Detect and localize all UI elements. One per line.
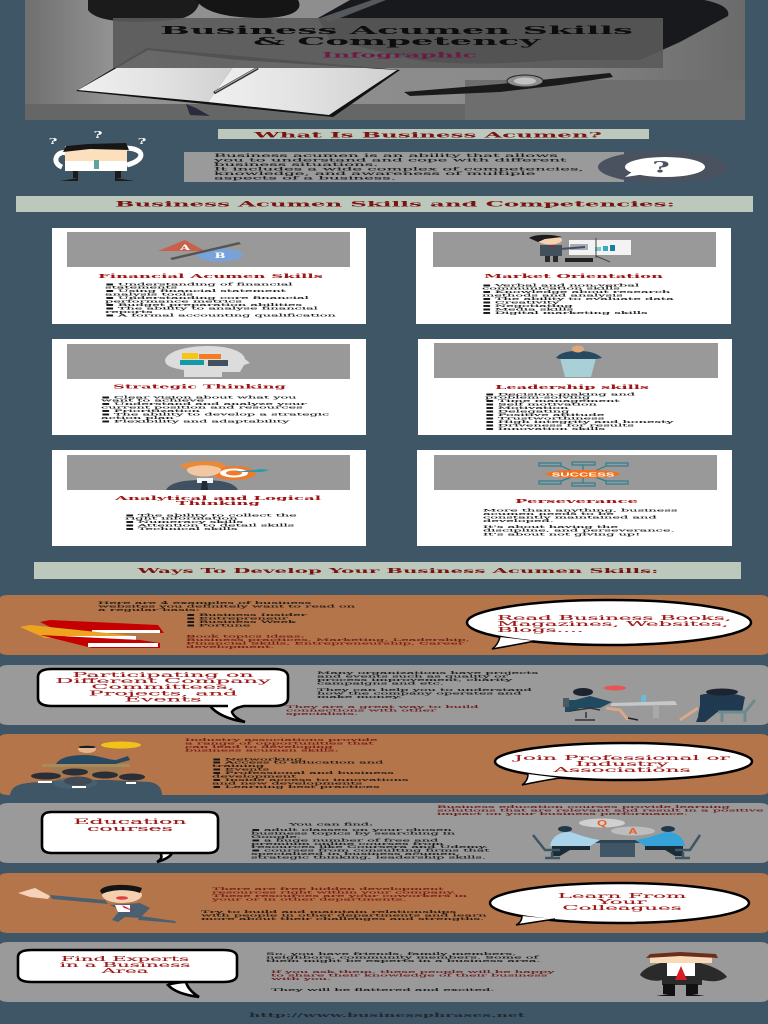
benefits list: ▪ Access to education and bbox=[212, 760, 383, 765]
definition text: It includes a wide complex of competencies, bbox=[214, 166, 584, 172]
skills list: ▪ Understanding core financial bbox=[105, 296, 309, 300]
benefits list: ▪ Events bbox=[212, 767, 269, 772]
course list: strategic thinking, leadership skills. bbox=[251, 855, 486, 860]
definition text: knowledge, and awareness of multiple bbox=[214, 171, 535, 176]
perseverance text: More than anything, business bbox=[483, 508, 678, 513]
skills list: ▪ Time management bbox=[485, 399, 620, 403]
course list: ▪ adult classes on your chosen bbox=[251, 828, 452, 832]
icon: questions and answers: A bbox=[628, 827, 638, 836]
card title: Thinking bbox=[176, 500, 260, 506]
skills list: action plan bbox=[101, 416, 174, 420]
benefits list: development bbox=[212, 774, 296, 779]
icon: success diagram bbox=[539, 462, 628, 486]
icon: questions and answers: Q bbox=[597, 819, 607, 828]
text: friends: So, you have friends, family members, bbox=[266, 952, 516, 956]
course list: premium online courses from bbox=[251, 842, 444, 846]
speech bubble: Industry bbox=[575, 760, 670, 768]
speech bubble: Projects, and bbox=[89, 689, 238, 697]
heading: skills and competencies bbox=[16, 196, 753, 212]
speech bubble: Events bbox=[124, 695, 202, 703]
course list: resources like Coursera and Udemy. bbox=[251, 845, 488, 849]
text: connections: They are a great way to build bbox=[286, 705, 478, 709]
panel: definition bbox=[184, 151, 728, 183]
intro text: Here are 4 examples of business bbox=[98, 601, 311, 605]
icon: presenter with chart bbox=[529, 235, 631, 262]
heading: ways to develop bbox=[34, 562, 741, 579]
skills list: ▪ Decision-making and bbox=[485, 392, 635, 397]
text: connections: specialists. bbox=[286, 712, 358, 716]
question marks: ? bbox=[49, 137, 57, 146]
panel: read business books bbox=[0, 595, 768, 655]
icon: leader at podium bbox=[556, 346, 602, 377]
benefits list: ▪ Learning best practices bbox=[212, 785, 380, 789]
speech bubble: Join Professional or bbox=[511, 754, 730, 762]
card title: Leadership skills bbox=[495, 384, 649, 390]
speech bubble: Education bbox=[73, 818, 187, 826]
title: & Competency bbox=[253, 35, 542, 48]
panel: strategic thinking bbox=[52, 339, 366, 435]
speech bubble: Learn From bbox=[558, 892, 686, 900]
text: relationships: more about their challenges and strengths. bbox=[201, 917, 484, 921]
speech bubble: Participating on bbox=[72, 671, 254, 679]
skills list: ▪ The ability to collect the bbox=[125, 513, 297, 518]
icon: question bubble bbox=[598, 151, 728, 183]
text: organizations: how the company operates and bbox=[317, 691, 521, 696]
skills list: ▪ Verbal and non-verbal bbox=[482, 283, 639, 288]
skills list: ▪ Numeracy skills bbox=[125, 520, 243, 524]
speech bubble: courses bbox=[87, 825, 173, 833]
skills list: ▪ Positive attitude bbox=[485, 413, 605, 417]
skills list: analysis tools bbox=[105, 292, 193, 297]
website list: ▪ Business Insider bbox=[186, 613, 307, 617]
perseverance text: It's about not giving up! bbox=[483, 532, 640, 537]
text: connections: connections with other bbox=[286, 708, 437, 713]
panel: perseverance bbox=[417, 450, 732, 546]
book topics: Financial Skills, Entrepreneurship, Career bbox=[186, 641, 465, 646]
course list: business topics by searching in bbox=[251, 831, 455, 836]
card title: Perseverance bbox=[515, 498, 638, 504]
speech bubble: Different Company bbox=[55, 677, 271, 685]
course list: Google. bbox=[251, 835, 301, 839]
speech bubble: Magazines, Websites, bbox=[497, 620, 728, 628]
header photo bbox=[25, 0, 745, 120]
skills list: want to achieve bbox=[101, 398, 205, 403]
panel: participating on committees bbox=[0, 665, 768, 725]
speech bubble: Your bbox=[596, 898, 647, 906]
skills list: ▪ Digital marketing skills bbox=[482, 311, 648, 315]
panel: learn from colleagues bbox=[0, 873, 768, 933]
perseverance text: It's about having the bbox=[483, 525, 618, 529]
panel: financial acumen skills bbox=[52, 228, 366, 324]
benefits list: ▪ Inside access to innovations bbox=[212, 778, 409, 782]
speech bubble bbox=[38, 669, 288, 722]
icon: success diagram: SUCCESS bbox=[552, 472, 615, 478]
speech bubble: Associations bbox=[552, 766, 691, 774]
skills list: ▪ Understand and analyze your bbox=[101, 402, 307, 406]
perseverance text: constantly maintained and bbox=[483, 515, 657, 520]
panel: join professional associations bbox=[0, 734, 768, 795]
panel: find experts bbox=[0, 942, 768, 1002]
skills list: ▪ Using financial statement bbox=[105, 289, 286, 293]
panel: market orientation bbox=[416, 228, 731, 324]
definition text: Business acumen is an ability that allows bbox=[214, 153, 558, 158]
you can find: You can find: bbox=[288, 822, 373, 827]
title: Business Acumen Skills bbox=[160, 24, 633, 37]
skills list: ▪ Innovation skills bbox=[485, 427, 605, 431]
website list: ▪ Business Week bbox=[186, 620, 296, 624]
text: happy to share: If you ask them, these people will be happy bbox=[271, 970, 555, 974]
intro text: websites you definitely want to read on bbox=[98, 604, 355, 609]
skills list: ▪ The ability to analyse financial bbox=[105, 306, 318, 311]
benefits list: and new developments bbox=[212, 781, 362, 786]
book topics: Book topics ideas: bbox=[186, 634, 305, 639]
skills list: ▪ Delegating bbox=[485, 409, 569, 414]
text: happy to share: with you. bbox=[271, 977, 331, 981]
text: hidden resources: your or in other departments. bbox=[211, 897, 406, 902]
text: flattered: They will be flattered and excited. bbox=[271, 988, 495, 992]
skills list: ▪ Attention to detail skills bbox=[125, 523, 294, 528]
text: happy to share: to share their knowledge of their business bbox=[271, 973, 548, 978]
panel: education courses bbox=[0, 803, 768, 863]
website list: ▪ Fortune bbox=[186, 623, 251, 628]
speech bubble: Read Business Books, bbox=[497, 614, 731, 622]
speech bubble bbox=[467, 600, 751, 649]
title panel bbox=[113, 18, 663, 68]
text: organizations: Many organizations have projects bbox=[317, 671, 538, 675]
skills list: ▪ Technical skills bbox=[125, 527, 238, 531]
skills list: ▪ Self motivation bbox=[485, 402, 597, 407]
icon: meeting bbox=[563, 686, 755, 722]
footer url: http://www.businessphrases.net bbox=[249, 1012, 526, 1018]
icon: A/B: B bbox=[215, 251, 225, 260]
speech bubble: Colleagues bbox=[562, 904, 682, 912]
skills list: ▪ Knowledge about research bbox=[482, 290, 670, 294]
text: organizations: and events such as quality or bbox=[317, 674, 509, 679]
book topics: Business practices, Marketing, Leadership, bbox=[186, 638, 470, 642]
skills list: statements bbox=[105, 285, 177, 290]
skills list: ▪ Clear vision about what you bbox=[101, 395, 297, 400]
skills list: ▪ Flexibility and adaptability bbox=[101, 419, 290, 424]
definition text: you to understand and cope with different bbox=[213, 157, 567, 163]
text: relationships: with people in other departments and learn bbox=[201, 913, 487, 918]
icon: questions and answers bbox=[533, 818, 700, 858]
skills list: performance metrics bbox=[105, 299, 242, 304]
skills list: ▪ Prioritization bbox=[101, 409, 200, 413]
course list: specialized in business acumen, bbox=[251, 852, 460, 856]
speech bubble bbox=[495, 743, 752, 785]
skills list: ▪ Driveness for results bbox=[485, 423, 634, 428]
skills list: ▪ Negotiating bbox=[482, 304, 573, 308]
skills list: ▪ Creativity bbox=[482, 300, 560, 305]
text: hidden resources: These resources are your coworkers in bbox=[212, 894, 467, 898]
definition text: aspects of a business. bbox=[214, 175, 396, 180]
speech bubble: in a Business bbox=[60, 962, 190, 969]
book topics: development. bbox=[186, 645, 274, 649]
skills list: right information bbox=[125, 516, 238, 521]
icon: puzzle head bbox=[165, 346, 250, 377]
intro text: can lead to developing bbox=[185, 745, 333, 749]
text: friends: neighbors, community members. Some of bbox=[266, 955, 540, 960]
skills list: ▪ Budget preparation abilities bbox=[105, 303, 302, 307]
skills list: communication skills bbox=[482, 286, 620, 291]
card title: Strategic Thinking bbox=[113, 383, 286, 390]
perseverance text: developed. bbox=[483, 519, 554, 523]
speech bubble bbox=[490, 883, 749, 925]
skills list: ▪ Understanding of financial bbox=[105, 282, 293, 287]
panel: leadership skills bbox=[418, 339, 732, 435]
speech bubble bbox=[42, 812, 218, 862]
skills list: reports bbox=[105, 310, 153, 314]
skills list: problem-solving bbox=[485, 395, 590, 400]
text: friends: them might be experts in a business area. bbox=[266, 959, 541, 963]
course list: ▪ a huge number of free and bbox=[251, 838, 438, 843]
text: organizations: They can help you to understand bbox=[317, 688, 532, 692]
intro text: solutions that are relevant and result in a positive bbox=[437, 808, 764, 813]
icon: A/B bbox=[158, 240, 243, 262]
speech bubble bbox=[18, 950, 237, 997]
skills list: methods and analysis bbox=[482, 293, 623, 298]
speech bubble: Committees, bbox=[91, 683, 235, 691]
heading: what is business acumen: What Is Business Acumen? bbox=[253, 131, 602, 139]
panel: analytical and logical thinking bbox=[52, 450, 366, 546]
heading: what is business acumen bbox=[218, 129, 649, 139]
text: hidden resources: resources right within your company. bbox=[212, 890, 456, 895]
subtitle: Infographic bbox=[322, 50, 477, 59]
course list: ▪ courses from consulting firms that bbox=[251, 848, 490, 853]
speech bubble: Area bbox=[100, 968, 149, 975]
text: organizations: campaigns and etc. bbox=[317, 681, 444, 686]
icon: books bbox=[20, 620, 164, 648]
text: organizations: make money. bbox=[317, 695, 402, 699]
icon: A/B: A bbox=[179, 243, 191, 252]
benefits list: ▪ Professional and business bbox=[212, 771, 394, 775]
heading: ways to develop: Ways To Develop Your Business Acumen Skills: bbox=[136, 567, 658, 575]
benefits list: ▪ Networking bbox=[212, 757, 302, 762]
skills list: ▪ A formal accounting qualification bbox=[105, 313, 336, 318]
skills list: ▪ Motivation bbox=[485, 406, 568, 410]
question marks: ? bbox=[94, 129, 102, 140]
intro text: a regular basis: bbox=[98, 608, 200, 612]
skills list: ▪ The ability to develop a strategic bbox=[101, 412, 329, 417]
benefits list: training bbox=[212, 764, 264, 768]
card title: Analytical and Logical bbox=[114, 495, 321, 501]
skills list: ▪ The ability to evaluate data bbox=[482, 297, 674, 301]
question marks: ? bbox=[138, 137, 146, 146]
card title: Market Orientation bbox=[484, 273, 663, 279]
icon: worried businessman bbox=[640, 952, 727, 996]
card title: Financial Acumen Skills bbox=[98, 273, 323, 279]
intro text: impact on your business performance. bbox=[437, 812, 688, 816]
skills list: current position and resources bbox=[101, 405, 303, 410]
icon: confused businessman bbox=[49, 129, 146, 181]
text: relationships: Try to build and maintain relationships bbox=[201, 910, 456, 914]
intro text: a range of opportunities that bbox=[185, 741, 374, 746]
text: organizations: process improvement, charity bbox=[317, 678, 513, 682]
perseverance text: discipline, and perseverance. bbox=[483, 528, 675, 533]
skills list: ▪ Trustworthiness bbox=[485, 416, 605, 421]
speech bubble: Find Experts bbox=[61, 956, 189, 963]
icon: running businessman bbox=[18, 885, 176, 923]
speech bubble: Blogs.... bbox=[497, 626, 583, 634]
website list: ▪ Entrepreneur bbox=[186, 616, 289, 621]
icon: man with target bbox=[166, 461, 270, 490]
text: hidden resources: There are free hidden development bbox=[212, 887, 444, 891]
heading: skills and competencies: Business Acumen Skills and Competencies: bbox=[115, 200, 675, 208]
skills list: ▪ High integrity and honesty bbox=[485, 420, 674, 424]
intro text: Business education courses provide learning bbox=[437, 805, 730, 809]
skills list: ▪ Media skills bbox=[482, 307, 573, 312]
intro text: Industry associations provide bbox=[185, 738, 378, 742]
icon: question bubble: ? bbox=[652, 158, 670, 176]
question marks bbox=[49, 129, 146, 146]
definition text: business situations. bbox=[214, 162, 378, 167]
icon: speaker with audience bbox=[10, 742, 162, 795]
perseverance text: acumen needs to be bbox=[483, 512, 614, 516]
intro text: business acumen skills: bbox=[185, 748, 339, 753]
